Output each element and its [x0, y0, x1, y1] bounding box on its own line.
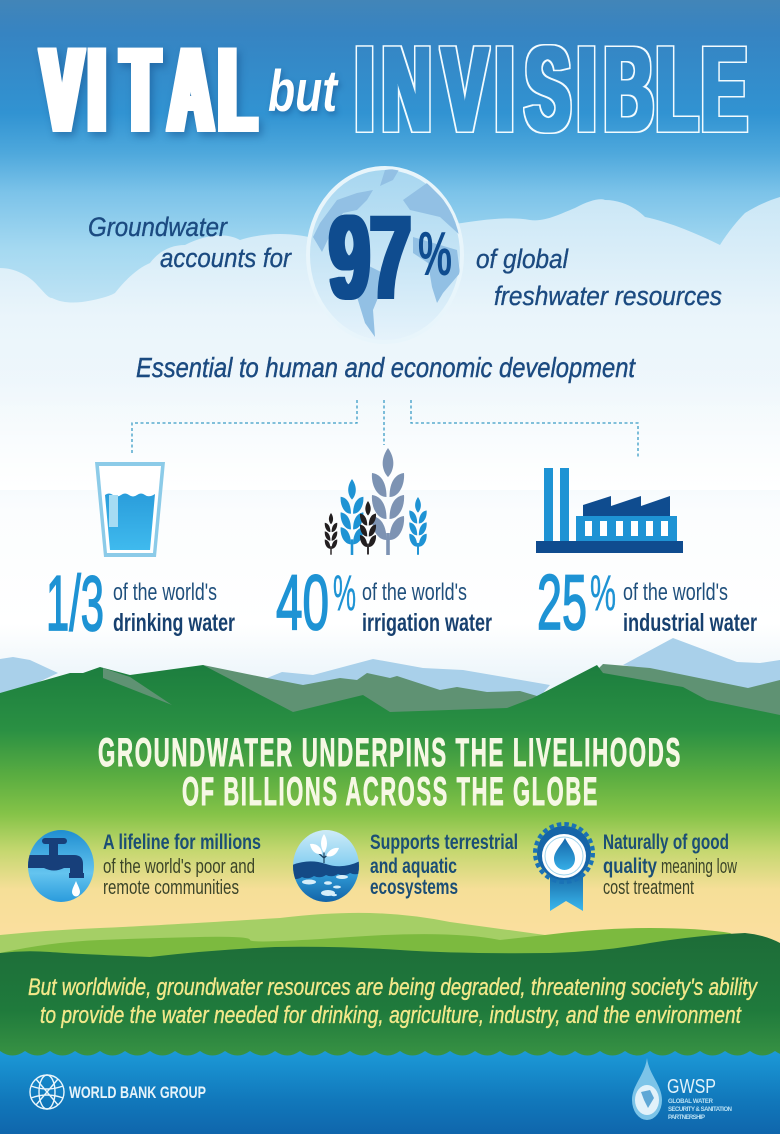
item text: quality: Naturally of good: [603, 831, 729, 854]
item text: ecosystems: and aquatic: [370, 855, 457, 878]
item text: quality: meaning low: [661, 856, 737, 878]
item text: ecosystems: [370, 831, 518, 899]
intro text left: Groundwater: [88, 212, 228, 242]
stat: irrigation water: [276, 558, 492, 646]
item text: quality: [603, 831, 737, 899]
intro text right: freshwater resources: [494, 281, 722, 311]
stat: irrigation water: 40: [276, 558, 329, 646]
stat: industrial water: of the world's: [623, 579, 728, 606]
dotted connector lines: [132, 400, 638, 457]
section heading: [98, 731, 682, 814]
icon: ecosystem: [293, 830, 359, 902]
item text: quality: quality: [603, 855, 657, 878]
plant: [310, 834, 339, 863]
intro text right: [476, 244, 722, 311]
logo: World Bank Group: [30, 1075, 206, 1109]
title: [42, 20, 747, 158]
subheading: Essential to human and economic development: [136, 352, 636, 383]
title word: INVISIBLE: INVISIBLE: [355, 20, 747, 157]
item text: lifeline: remote communities: [103, 877, 239, 899]
icon: factory: [536, 468, 683, 553]
logo: GWSP: PARTNERSHIP: [668, 1115, 705, 1121]
stat: drinking water: drinking water: [113, 609, 235, 637]
green mountains and meadow: [0, 665, 780, 960]
big figure 97: 97: [329, 192, 411, 324]
world bank globe mark: [30, 1075, 64, 1109]
distant blue mountains: [0, 638, 780, 700]
item text: lifeline: of the world's poor and: [103, 856, 255, 878]
stat: drinking water: [46, 559, 235, 647]
icon: glass of water: [95, 462, 165, 557]
intro text left: [88, 212, 292, 273]
dark green hill band: [0, 933, 780, 1062]
grey green mid mountains: [200, 664, 780, 730]
icon: wheat stalks: [325, 448, 427, 555]
warning statement: [28, 974, 759, 1029]
item text: quality: cost treatment: [603, 877, 694, 899]
stat: irrigation water: %: [333, 565, 356, 621]
GWSP water drop mark: [632, 1058, 662, 1120]
logo: World Bank Group: WORLD BANK GROUP: [69, 1083, 206, 1102]
intro text left: accounts for: [160, 243, 292, 273]
logo: GWSP: SECURITY & SANITATION: [668, 1107, 732, 1113]
stat: drinking water: of the world's: [113, 579, 217, 606]
item text: lifeline: [103, 831, 261, 899]
item text: ecosystems: ecosystems: [370, 876, 458, 899]
icon: quality badge: [535, 824, 593, 911]
title word: but: but: [268, 59, 339, 124]
stat: drinking water: 1/3: [46, 559, 104, 647]
item text: lifeline: A lifeline for millions: [103, 831, 261, 854]
rolling hills: [0, 913, 780, 970]
logo: GWSP: GLOBAL WATER: [668, 1099, 714, 1105]
title word: VITAL: VITAL: [42, 23, 256, 158]
item text: ecosystems: Supports terrestrial: [370, 831, 518, 854]
water band: [0, 1051, 780, 1134]
stat: irrigation water: of the world's: [362, 579, 467, 606]
stat: industrial water: [537, 558, 757, 646]
stat: industrial water: %: [590, 565, 616, 621]
stat: irrigation water: irrigation water: [362, 609, 492, 637]
icon: water tap: [28, 830, 94, 902]
globe with 97 percent: [308, 168, 462, 342]
mountain ridge shadow: [103, 668, 172, 705]
clouds: [0, 197, 780, 470]
cloud fade: [0, 380, 780, 490]
globe land masses: [313, 168, 462, 337]
logo: GWSP: [632, 1058, 732, 1121]
stat: industrial water: 25: [537, 558, 587, 646]
logo: GWSP: GWSP: [667, 1076, 716, 1098]
percent sign: %: [418, 220, 452, 289]
intro text right: of global: [476, 244, 569, 274]
